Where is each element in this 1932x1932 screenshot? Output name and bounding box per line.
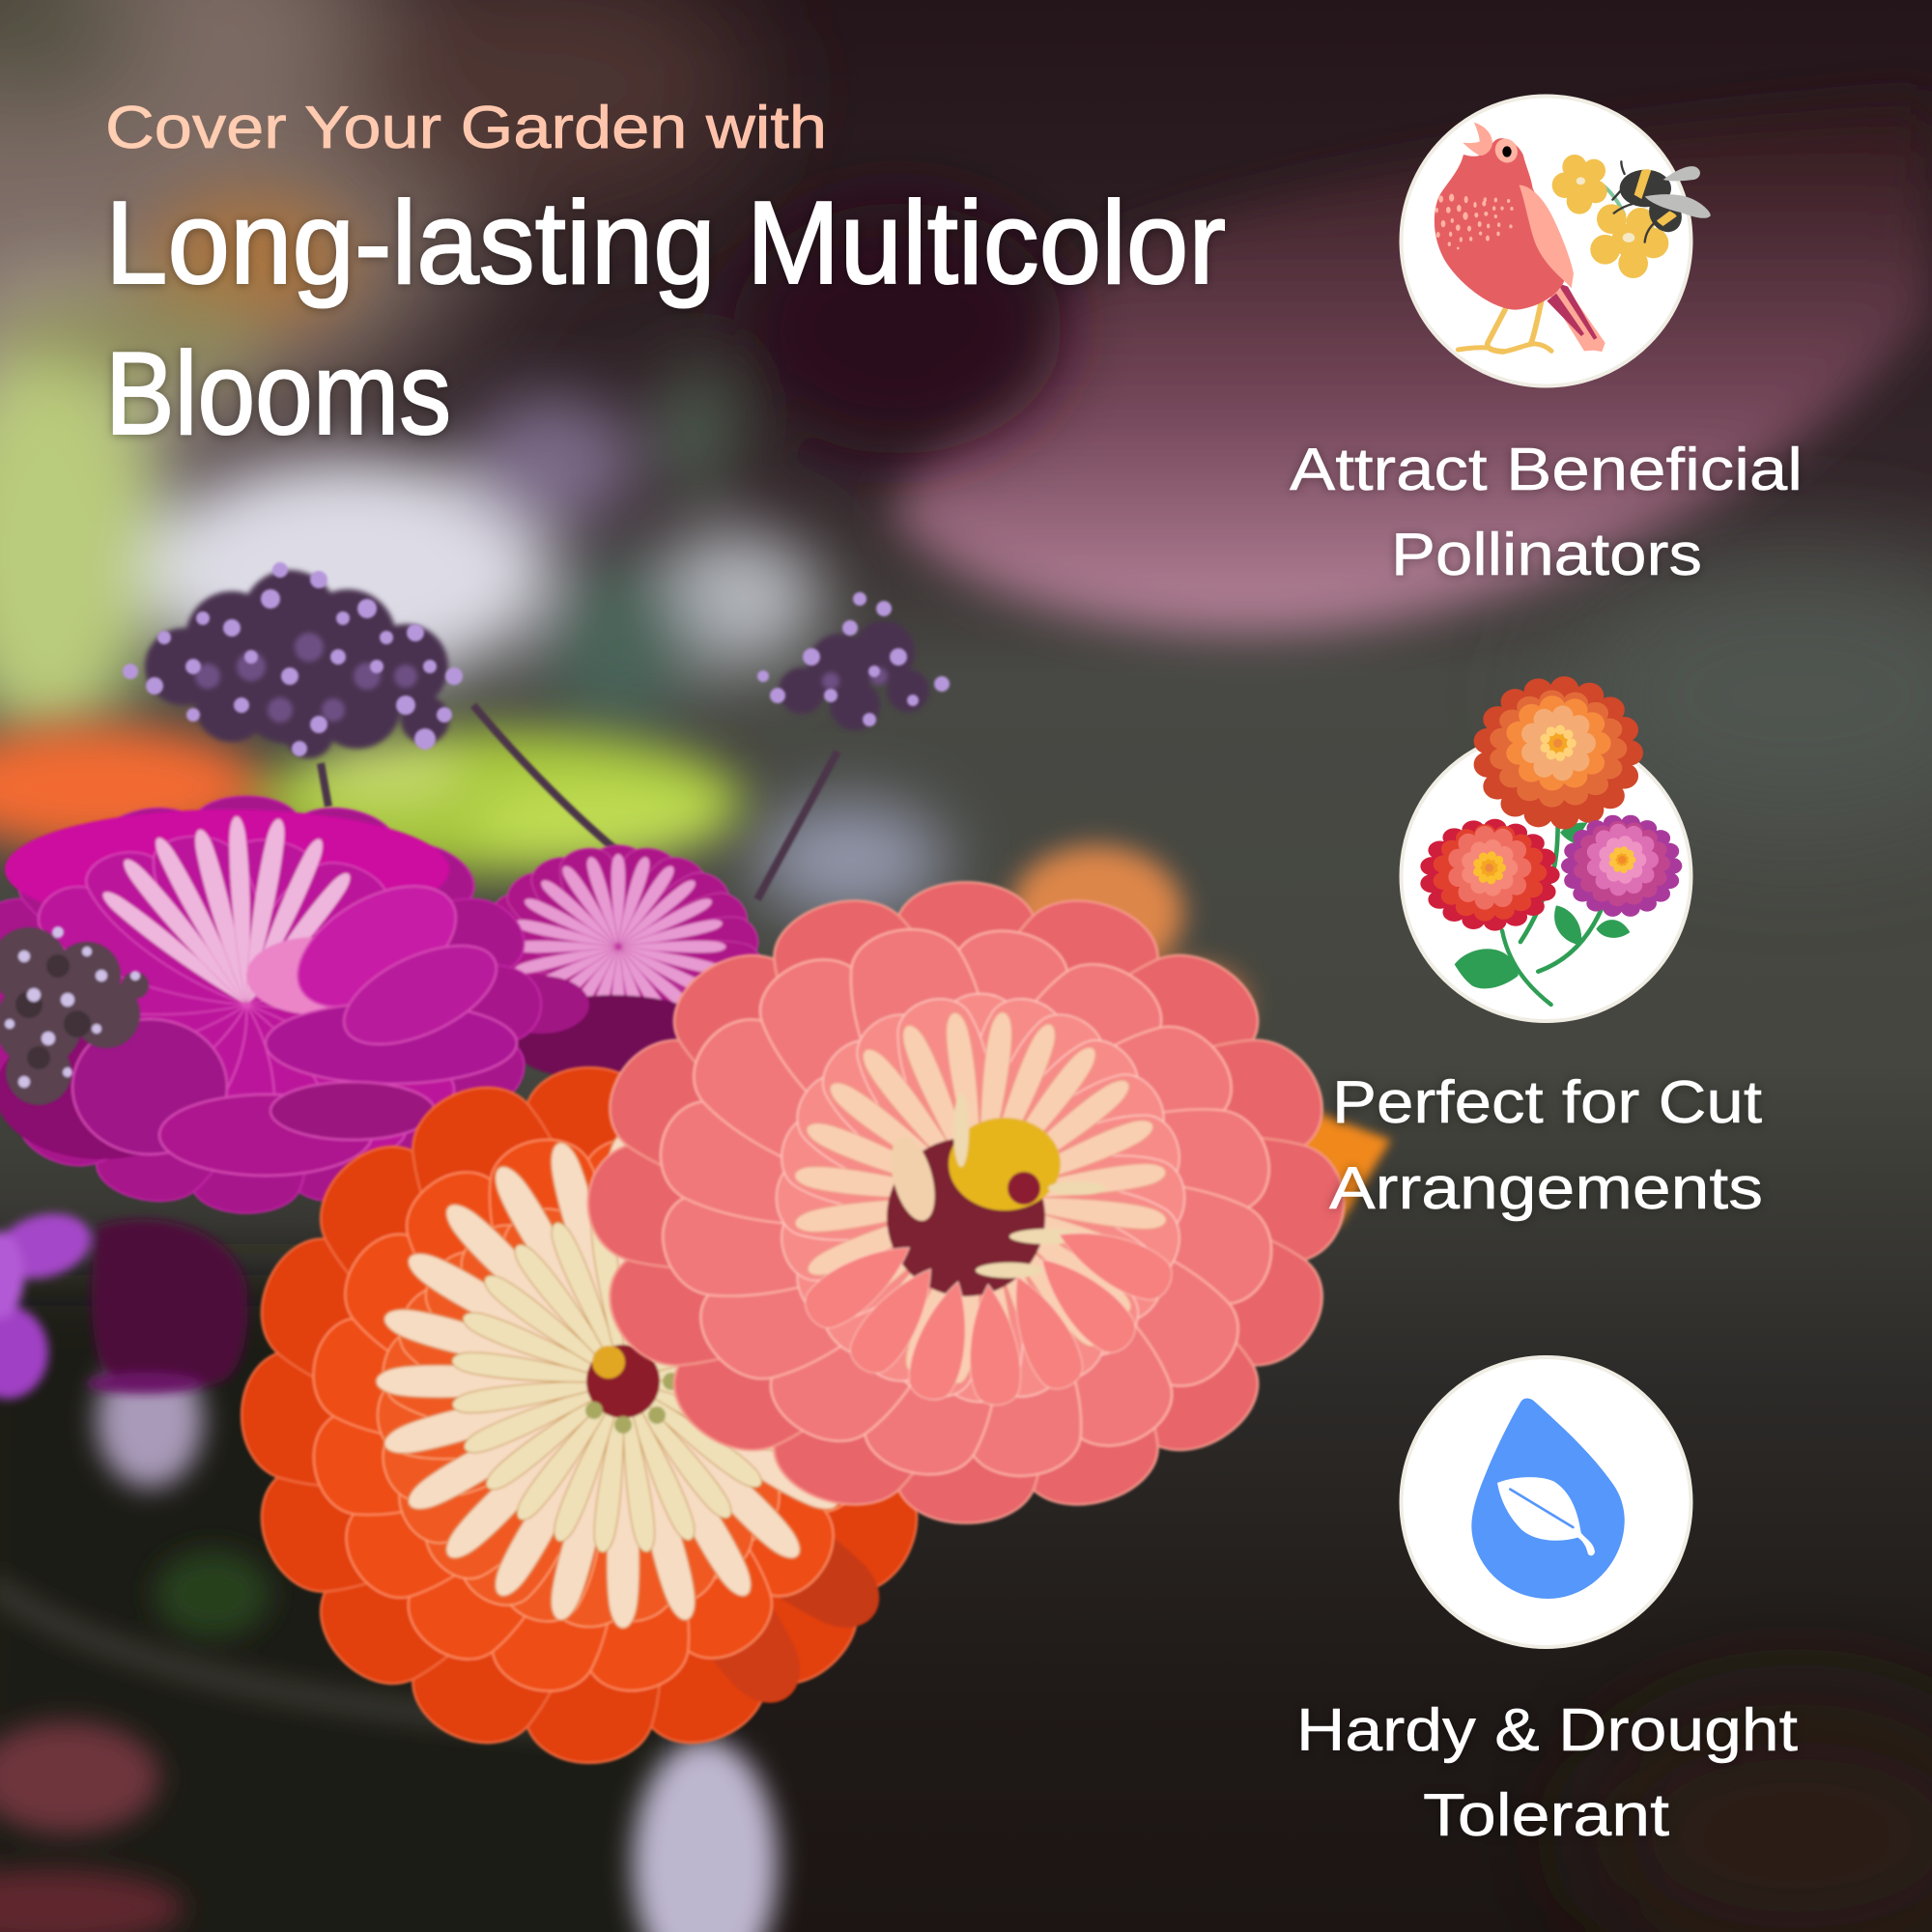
photo: small verbena cluster [0,926,149,1105]
label: perfect for cut arrangements: Arrangements [1329,1155,1763,1222]
heading [105,95,1226,459]
label: hardy and drought tolerant: Hardy & Drought [1296,1697,1798,1764]
label: perfect for cut arrangements: Perfect for Cut [1332,1069,1762,1136]
main title: Blooms [105,327,451,459]
label: hardy and drought tolerant [1296,1697,1798,1849]
magenta zinnia right [471,842,765,1090]
eyebrow title: Cover Your Garden with [105,95,827,161]
photo: purple flowers at left edge [0,1204,247,1399]
stems and leaves [1455,821,1630,1005]
feature: cut arrangements [1329,689,1763,1222]
photo: orange zinnia [241,1066,938,1764]
main title: Long-lasting Multicolor [105,177,1226,308]
label: perfect for cut arrangements [1329,1069,1763,1222]
label: attract beneficial pollinators: Pollinators [1391,522,1702,588]
icon: water drop with leaf [1401,1357,1690,1647]
label: attract beneficial pollinators: Attract Beneficial [1290,437,1803,503]
icon: three zinnias [1401,689,1690,1021]
purple zinnia [1571,823,1672,909]
label: hardy and drought tolerant: Tolerant [1423,1782,1669,1849]
red zinnia [1431,828,1548,922]
feature: drought tolerant [1296,1357,1798,1849]
magenta zinnia left [0,795,542,1214]
photo: coral zinnia [587,872,1345,1533]
photo: verbena blooms and stems [123,562,950,899]
main title [105,177,1226,459]
label: attract beneficial pollinators [1290,437,1803,588]
orange zinnia [1487,689,1629,816]
feature: pollinators [1290,97,1803,588]
photo: magenta zinnias [0,795,765,1214]
icon: bird and bee [1401,97,1711,386]
